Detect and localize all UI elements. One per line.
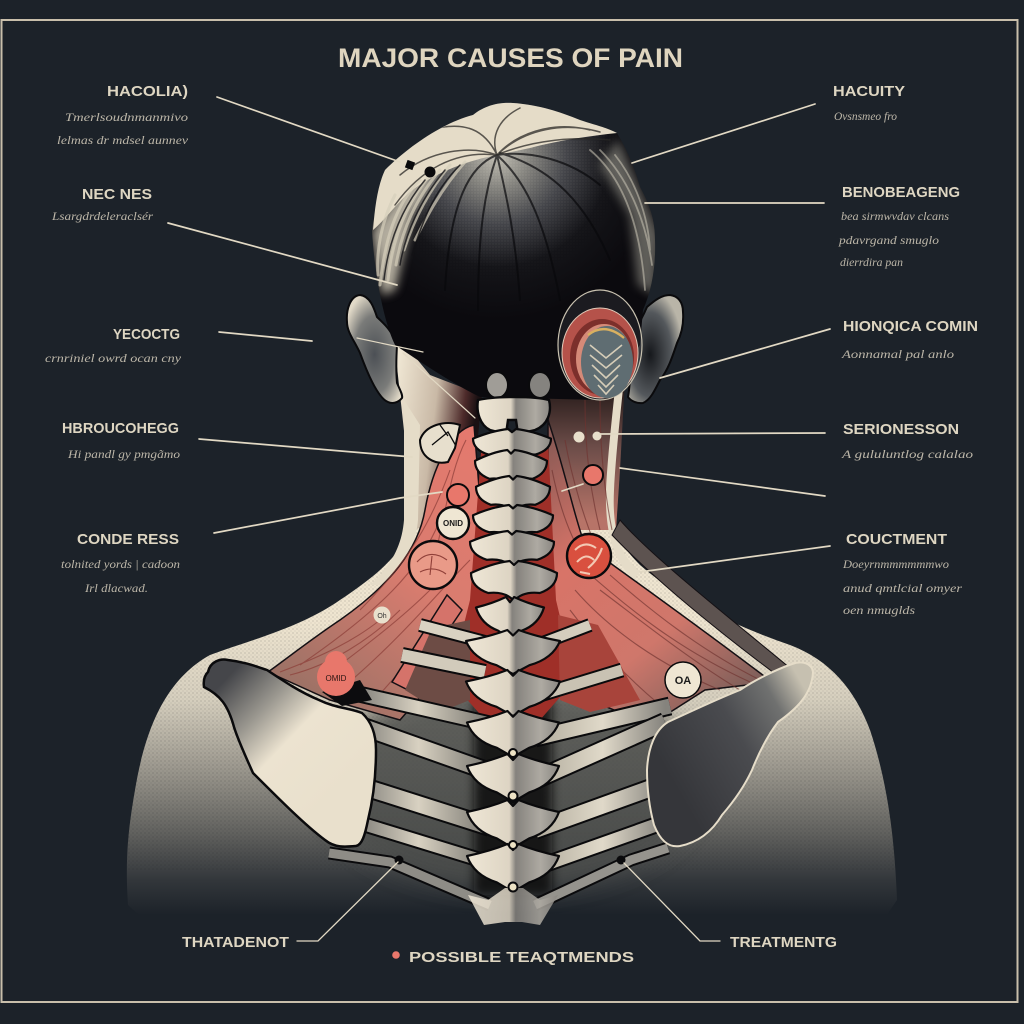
spinal canal dots — [508, 749, 518, 892]
cream crown band — [373, 103, 617, 230]
callout: conde ress: Irl dlacwad. — [84, 581, 148, 595]
spine — [466, 372, 560, 925]
pain marker: muscle cross section left — [409, 541, 457, 589]
callout: hionqica comin: HIONQICA COMIN — [843, 318, 978, 335]
neck highlight right — [606, 360, 640, 580]
callout: serionesson: SERIONESSON — [843, 421, 959, 438]
muscles right — [548, 400, 790, 725]
callout: hionqica comin — [841, 318, 978, 361]
callout: hbroucohegg: Hi pandl gy pmgãmo — [67, 447, 180, 461]
leader lines right — [562, 104, 830, 572]
ear left — [347, 295, 402, 403]
pain marker: small cream circle — [374, 606, 390, 624]
callout: conde ress: CONDE RESS — [77, 531, 179, 548]
callout: benobeageng: bea sirmwvdav clcans — [841, 209, 949, 223]
callout: couctment — [842, 531, 962, 617]
callout: serionesson: A gululuntlog calalao — [841, 447, 973, 461]
callout: benobeageng: pdavrgand smuglo — [838, 233, 939, 247]
callout: hbroucohegg — [62, 420, 180, 461]
pain marker: red lobed label — [317, 651, 372, 706]
pain marker: cream circle right: OA — [675, 675, 691, 687]
callout: benobeageng: BENOBEAGENG — [842, 184, 960, 201]
callout: conde ress: tolnited yords | cadoon — [61, 557, 180, 571]
callout: couctment: Doeyrnmmmmmmwo — [842, 557, 949, 571]
callout: nec nes: NEC NES — [82, 186, 152, 203]
callout: nec nes: Lsargdrdeleraclsér — [51, 209, 153, 223]
callout: yecoctg: YECOCTG — [113, 326, 180, 343]
neck highlight left — [370, 400, 420, 585]
hair side highlights — [372, 140, 660, 295]
title: MAJOR CAUSES OF PAIN — [338, 43, 683, 73]
callout: hbroucohegg: HBROUCOHEGG — [62, 420, 179, 437]
pain marker: red lobed label: OMID — [326, 674, 347, 683]
ribs right — [535, 625, 670, 905]
muscles left — [268, 425, 480, 720]
pain inset: nerve circle — [558, 290, 642, 400]
callout: nec nes — [51, 186, 153, 223]
atlas vertebra — [478, 397, 550, 434]
hair stipple — [412, 136, 610, 268]
label: thatadenot: THATADENOT — [182, 934, 289, 951]
pain marker: red dot left — [447, 484, 469, 506]
callout: benobeageng — [838, 184, 960, 269]
neck right side — [545, 378, 625, 530]
scapula left — [204, 660, 376, 847]
deep muscle behind spine — [450, 440, 575, 720]
callout: hacuity: Ovsnsmeo fro — [834, 109, 897, 123]
callout: hacuity — [833, 83, 905, 123]
leader lines bottom — [297, 862, 720, 941]
callout: yecoctg: crnriniel owrd ocan cny — [45, 351, 182, 365]
legend: possible treatments: POSSIBLE TEAQTMENDS — [409, 949, 634, 966]
pain marker: labelled cream circle: ONID — [443, 519, 463, 528]
pain marker: muscle cross section right — [567, 534, 611, 578]
callout: hionqica comin: Aonnamal pal anlo — [841, 347, 954, 361]
thoracic vertebrae — [466, 597, 560, 925]
top knobs — [486, 372, 508, 398]
leader lines left — [168, 97, 475, 533]
torso — [127, 515, 897, 925]
callout: serionesson — [841, 421, 973, 461]
ear right — [628, 295, 683, 403]
callout: conde ress — [61, 531, 180, 595]
callout: hacolia: lelmas dr mdsel aunnev — [57, 133, 189, 147]
callout: benobeageng: dierrdira pan — [840, 255, 903, 269]
figure: back and shoulders — [120, 100, 900, 925]
callout: couctment: COUCTMENT — [846, 531, 947, 548]
neck left side — [393, 330, 482, 530]
callout: hacolia: HACOLIA) — [107, 83, 188, 100]
pain marker: bone lump — [420, 423, 460, 463]
hair strands — [378, 108, 652, 310]
pain marker: small cream circle: Oh — [377, 613, 387, 620]
callout: couctment: oen nmuglds — [843, 603, 915, 617]
deep lower muscles left — [405, 620, 470, 712]
callout: hacuity: HACUITY — [833, 83, 905, 100]
hair and head — [360, 100, 660, 400]
deep lower muscles right — [558, 615, 640, 712]
callout: couctment: anud qmtlcial omyer — [843, 581, 962, 595]
pain marker: red dot right — [583, 465, 603, 485]
label: treatments: TREATMENTG — [730, 934, 837, 951]
pain marker: black dots — [394, 160, 626, 864]
pain marker: small dots — [574, 432, 602, 442]
callout: hacolia — [57, 83, 189, 147]
torso shading — [120, 515, 900, 895]
ribs left — [329, 625, 490, 905]
callout: yecoctg — [45, 326, 182, 365]
scapula right — [647, 662, 813, 846]
cervical vertebrae — [470, 429, 557, 601]
callout: hacolia: Tmerlsoudnmanmivo — [65, 110, 188, 124]
pain marker: labelled cream circle — [437, 507, 469, 539]
pain marker: cream circle right — [665, 662, 701, 698]
